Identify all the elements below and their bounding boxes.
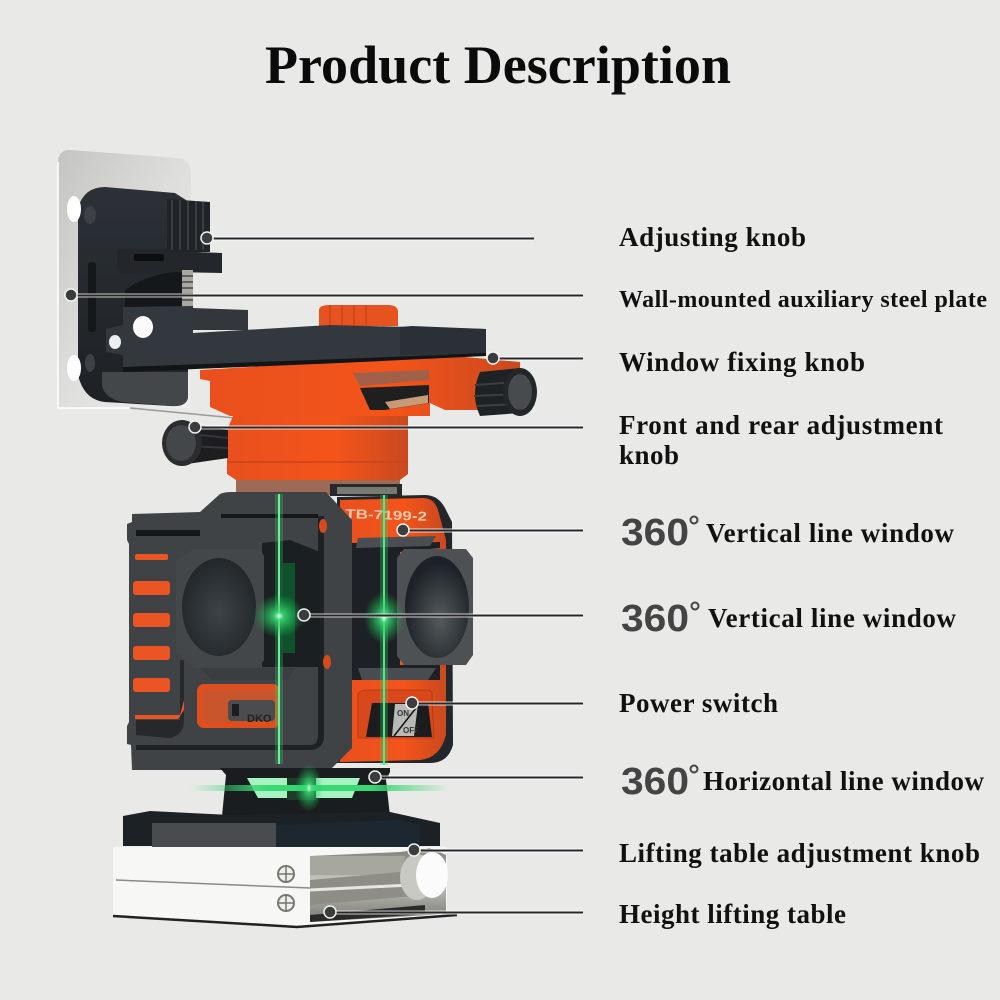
mode switch plate <box>197 684 280 728</box>
laser stand <box>220 768 390 816</box>
arm blocks behind <box>193 308 248 330</box>
label: height lifting table: Height lifting table <box>619 899 846 929</box>
label: 360 horizontal line window: Horizontal line window <box>703 766 984 796</box>
label: front and rear adjustment knob: knob <box>619 440 679 470</box>
screws <box>278 866 294 911</box>
label: wall-mounted steel plate: Wall-mounted auxiliary steel plate <box>619 287 987 313</box>
label: 360 vertical line window 2: 360 <box>621 598 689 640</box>
right lens <box>397 549 473 665</box>
horizontal arm <box>106 306 486 372</box>
horizontal laser line <box>190 764 450 812</box>
leader lines <box>71 238 583 912</box>
label: front and rear adjustment knob: Front and rear adjustment <box>619 410 943 440</box>
power switch: ON <box>397 709 409 718</box>
left lens and window <box>176 540 320 680</box>
power switch: OFF <box>403 726 419 735</box>
orange top knob <box>319 305 398 326</box>
label: window fixing knob: Window fixing knob <box>619 347 865 377</box>
front plate <box>127 492 352 770</box>
power switch <box>358 690 434 738</box>
label: 360 horizontal line window: 360 <box>621 761 689 803</box>
wall bracket <box>67 187 188 406</box>
side vents <box>133 554 184 719</box>
mode switch plate: DKO <box>247 713 272 725</box>
main body right side, orange: TB-7199-2 <box>345 506 427 524</box>
label: 360 vertical line window 1 <box>621 512 954 554</box>
front and rear adjustment knob <box>162 420 228 466</box>
label: 360 vertical line window 1: Vertical line window <box>706 518 954 548</box>
label: lifting table adjustment knob: Lifting table adjustment knob <box>619 838 980 868</box>
lifting table <box>113 847 457 928</box>
label: 360 horizontal line window <box>621 761 984 803</box>
window fixing knob <box>474 368 537 416</box>
product illustration: laser level <box>58 150 537 928</box>
label: adjusting knob: Adjusting knob <box>619 222 806 252</box>
orange carriage <box>200 355 520 416</box>
main body right side, orange <box>337 495 453 763</box>
wall-mounted steel plate <box>58 150 235 418</box>
label: power switch: Power switch <box>619 688 778 718</box>
label: 360 vertical line window 2: Vertical line window <box>708 603 956 633</box>
label: 360 vertical line window 2 <box>621 598 956 640</box>
adjusting knob <box>117 199 222 308</box>
title: Product Description <box>265 35 731 95</box>
vertical laser lines <box>253 494 404 765</box>
base plate <box>123 811 440 848</box>
label: 360 vertical line window 1: 360 <box>621 512 689 554</box>
label: front and rear adjustment knob <box>619 410 943 470</box>
rotating base cylinder <box>227 416 408 496</box>
leader dots <box>65 232 499 918</box>
